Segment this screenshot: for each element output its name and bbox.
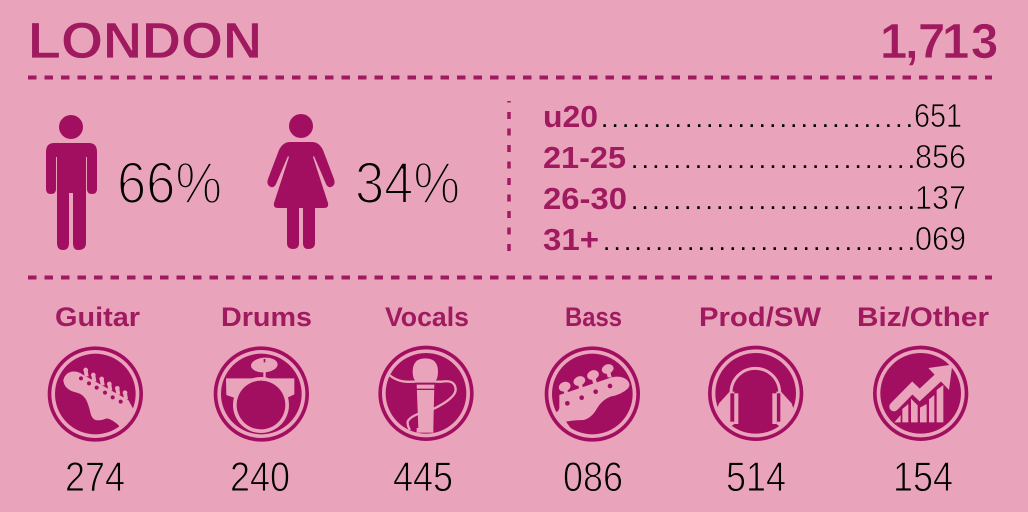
age row: 26-30: 137 (915, 179, 966, 216)
total count: 1,713 (880, 15, 998, 69)
age row: 31+: 31+ (543, 222, 599, 257)
count: guitar: 274 (65, 453, 125, 500)
age row: 31+: 069 (915, 220, 966, 257)
label: Bass: Bass (565, 302, 622, 332)
age row: 26-30 (543, 179, 966, 216)
age row: 21-25 (543, 138, 966, 175)
icon: headphones (710, 347, 801, 439)
icon: guitar headstock (49, 348, 143, 440)
icon: bass headstock (546, 348, 638, 440)
age row: 21-25: 21-25 (543, 140, 626, 175)
age table (543, 97, 966, 257)
age row: u20: .............................. (601, 103, 913, 133)
label: Biz/Other: Biz/Other (857, 302, 990, 332)
label: Drums: Drums (221, 302, 312, 332)
age row: 26-30: 26-30 (543, 181, 627, 216)
count: production: 514 (726, 453, 786, 500)
age row: 31+: .............................. (603, 226, 915, 256)
icon: woman (267, 114, 335, 249)
age row: 21-25: 856 (915, 138, 966, 175)
male percentage: 66% (117, 151, 222, 216)
female percentage: 34% (355, 151, 460, 216)
icon: man (46, 115, 97, 250)
age row: 21-25: ........................... (631, 144, 915, 174)
age row: u20 (543, 97, 962, 134)
title: LONDON (28, 12, 262, 69)
label: Guitar: Guitar (55, 302, 141, 332)
icon: microphone (380, 347, 472, 439)
icon: rising chart (875, 347, 966, 439)
count: drums: 240 (230, 453, 290, 500)
icon: drum kit (215, 348, 307, 440)
label: Vocals: Vocals (385, 302, 469, 332)
count: business: 154 (893, 453, 953, 500)
age row: u20: 651 (914, 97, 962, 134)
age row: u20: u20 (543, 99, 598, 134)
count: bass: 086 (563, 453, 623, 500)
age row: 26-30: ........................... (631, 185, 915, 215)
age row: 31+ (543, 220, 966, 257)
label: Prod/SW: Prod/SW (699, 302, 822, 332)
count: vocals: 445 (393, 453, 453, 500)
